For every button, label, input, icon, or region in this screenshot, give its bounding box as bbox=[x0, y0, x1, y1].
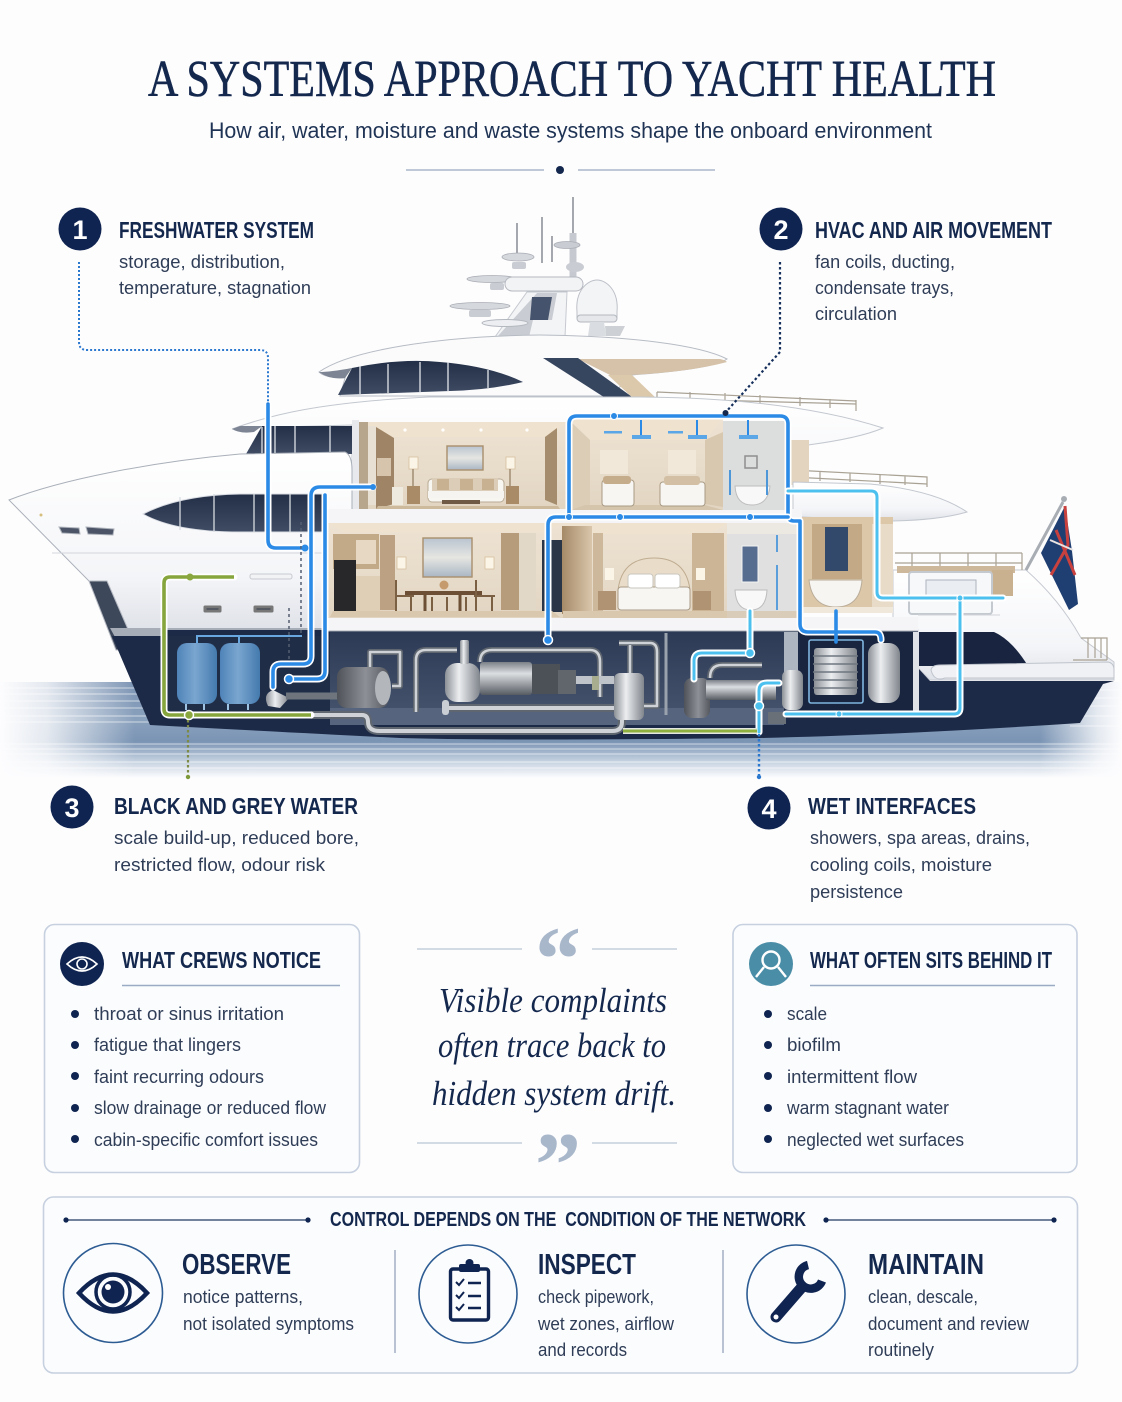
saloon bbox=[359, 422, 567, 509]
icon: eye badge bbox=[60, 942, 104, 986]
pipe: HVAC loop bbox=[544, 412, 881, 644]
leader line 1 bbox=[79, 262, 268, 404]
list: scale bbox=[787, 1004, 827, 1024]
callout 2: HVAC bbox=[760, 208, 1052, 324]
icon: wrench bbox=[774, 1265, 822, 1320]
maintain: document and review bbox=[868, 1314, 1030, 1334]
callout 1: freshwater system: temperature, stagnation bbox=[119, 278, 311, 298]
callout 4: wet interfaces: cooling coils, moisture bbox=[810, 855, 992, 875]
callout 4: wet interfaces: showers, spa areas, drains, bbox=[810, 828, 1030, 848]
callout 1: freshwater system: 1 bbox=[72, 215, 88, 245]
yacht cutaway illustration bbox=[0, 197, 1122, 780]
lower galley and dining bbox=[327, 523, 562, 618]
inspect: wet zones, airflow bbox=[537, 1314, 675, 1334]
stern ledge bbox=[931, 662, 1114, 679]
lower hull bbox=[112, 630, 1114, 740]
inspect: and records bbox=[538, 1340, 627, 1360]
sea bbox=[0, 680, 1122, 780]
callout 3: black and grey water: scale build-up, reduced bore, bbox=[114, 828, 359, 848]
flag bbox=[1026, 496, 1078, 610]
aft deck bbox=[789, 440, 967, 521]
machinery bbox=[266, 640, 900, 731]
callout 2: HVAC: HVAC AND AIR MOVEMENT bbox=[815, 217, 1052, 243]
pull quote: often trace back to bbox=[438, 1026, 666, 1065]
list: slow drainage or reduced flow bbox=[94, 1098, 327, 1118]
callout 2: HVAC: condensate trays, bbox=[815, 278, 954, 298]
panel: control strip bbox=[44, 1197, 1078, 1373]
observe: not isolated symptoms bbox=[183, 1314, 354, 1334]
callout 1: freshwater system bbox=[58, 208, 314, 298]
callout 3: black and grey water bbox=[50, 786, 359, 875]
forward hull bbox=[9, 452, 352, 650]
inspect: INSPECT bbox=[538, 1249, 636, 1281]
aft jacuzzi bbox=[909, 572, 1000, 615]
top deck roof bbox=[319, 335, 856, 411]
list bbox=[71, 1004, 327, 1150]
engine room bbox=[165, 632, 919, 725]
list: faint recurring odours bbox=[94, 1067, 264, 1087]
maintain: clean, descale, bbox=[868, 1287, 978, 1307]
icon: eye bbox=[79, 1274, 147, 1312]
callout 2: HVAC: circulation bbox=[815, 304, 897, 324]
list: intermittent flow bbox=[787, 1067, 918, 1087]
pipe: black and grey water bbox=[164, 574, 757, 731]
maintain: routinely bbox=[868, 1340, 934, 1360]
list: fatigue that lingers bbox=[94, 1035, 241, 1055]
second deck bbox=[232, 397, 883, 517]
list: throat or sinus irritation bbox=[94, 1004, 284, 1024]
pull quote: hidden system drift. bbox=[432, 1074, 676, 1113]
strip heading bbox=[63, 1209, 1057, 1231]
callout 3: black and grey water: 3 bbox=[64, 793, 80, 823]
icon: magnifier badge bbox=[749, 942, 793, 986]
lower bathroom bbox=[727, 523, 797, 618]
subtitle: How air, water, moisture and waste systems shape the onboard environment bbox=[209, 118, 932, 143]
pipe: freshwater bbox=[268, 404, 376, 687]
mast and radar bbox=[450, 197, 625, 337]
pull quote: Visible complaints bbox=[439, 981, 667, 1020]
callout 1: freshwater system: storage, distribution, bbox=[119, 252, 285, 272]
inspect bbox=[419, 1245, 675, 1360]
list: cabin-specific comfort issues bbox=[94, 1130, 318, 1150]
heading: WHAT CREWS NOTICE bbox=[122, 947, 321, 973]
callout 2: HVAC: 2 bbox=[773, 215, 789, 245]
callout 4: wet interfaces: 4 bbox=[761, 794, 777, 824]
list: biofilm bbox=[787, 1035, 841, 1055]
panel: what often sits behind it bbox=[733, 924, 1077, 1172]
list: warm stagnant water bbox=[786, 1098, 949, 1118]
list: neglected wet surfaces bbox=[787, 1130, 964, 1150]
HVAC ceiling diffusers bbox=[604, 420, 758, 439]
leader line 2 bbox=[722, 262, 780, 416]
strip heading: CONTROL DEPENDS ON THE CONDITION OF THE NETWORK bbox=[330, 1209, 806, 1231]
callout 4: wet interfaces: WET INTERFACES bbox=[808, 793, 976, 819]
white cabin floor band bbox=[327, 509, 918, 631]
callout 4: wet interfaces: persistence bbox=[810, 882, 903, 902]
stern hull and cockpit bbox=[893, 553, 1114, 680]
pull quote: ” bbox=[535, 1114, 581, 1216]
stateroom bbox=[562, 523, 727, 618]
icon: clipboard bbox=[450, 1259, 488, 1320]
maintain bbox=[747, 1245, 1030, 1360]
callout 4: wet interfaces bbox=[748, 786, 1030, 902]
pipe: wet interfaces bbox=[694, 491, 1003, 732]
callout 3: black and grey water: BLACK AND GREY WATER bbox=[114, 793, 358, 819]
freshwater tanks bbox=[177, 636, 302, 710]
panel: what crews notice bbox=[44, 924, 360, 1172]
pull quote: “ bbox=[535, 908, 581, 1010]
leader line 3 bbox=[186, 720, 190, 779]
maintain: MAINTAIN bbox=[868, 1249, 984, 1281]
inspect: check pipework, bbox=[538, 1287, 654, 1307]
flybridge windows bbox=[338, 361, 523, 395]
list bbox=[764, 1004, 964, 1150]
aft roof recess bbox=[578, 359, 727, 376]
aft spa room bbox=[802, 517, 893, 613]
observe: notice patterns, bbox=[183, 1287, 303, 1307]
callout 1: freshwater system: FRESHWATER SYSTEM bbox=[119, 217, 314, 243]
leader line 4 bbox=[757, 734, 761, 779]
pull quote bbox=[417, 908, 677, 1216]
stern window bbox=[918, 632, 1028, 666]
callout 2: HVAC: fan coils, ducting, bbox=[815, 252, 955, 272]
upper staterooms bbox=[569, 418, 785, 510]
callout 3: black and grey water: restricted flow, odour risk bbox=[114, 855, 326, 875]
observe bbox=[64, 1244, 354, 1342]
observe: OBSERVE bbox=[182, 1249, 291, 1281]
